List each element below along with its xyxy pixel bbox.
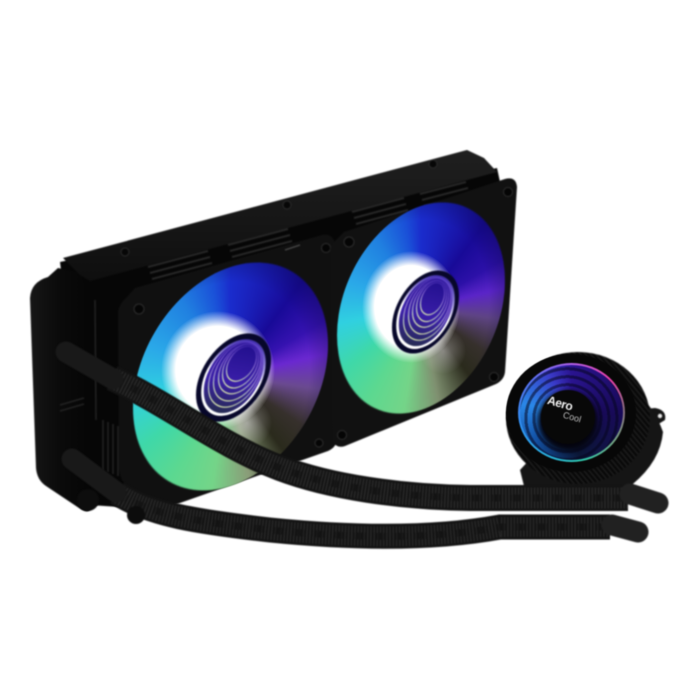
fan 1 white glow: [161, 311, 275, 429]
upper cable sleeves: [66, 352, 658, 503]
pump body: [506, 352, 663, 490]
fan 1 blades lit: [132, 235, 328, 517]
radiator body: [60, 168, 505, 508]
lower cable sleeves: [72, 459, 638, 532]
pump mounting tab: [645, 408, 665, 428]
fan 1 frame: [118, 235, 337, 511]
fan 2 lower right pale glow: [420, 328, 466, 374]
pump logo cap: [541, 390, 595, 444]
radiator top bar: [63, 150, 497, 281]
logo text: Cool: [562, 410, 582, 425]
fan 2 white glow: [362, 251, 460, 363]
logo text: Aero: [546, 393, 574, 414]
fan 2 blades lit: [337, 178, 505, 437]
radiator end cap: [30, 268, 92, 511]
fan 2 frame: [330, 178, 517, 447]
pump mirror inner spiral: [520, 365, 623, 460]
fan 1 infinity mirror hub: [198, 322, 270, 433]
fan 1 lower right pale glow: [222, 398, 272, 448]
upper cable: [112, 378, 628, 498]
pump face: [506, 354, 636, 472]
logo text: [546, 393, 582, 425]
pump RGB ring: [518, 363, 625, 462]
radiator side slats: [60, 300, 118, 476]
fan 2 infinity mirror hub: [394, 260, 458, 364]
lower cable: [117, 493, 610, 536]
radiator grille slats: [148, 182, 470, 279]
